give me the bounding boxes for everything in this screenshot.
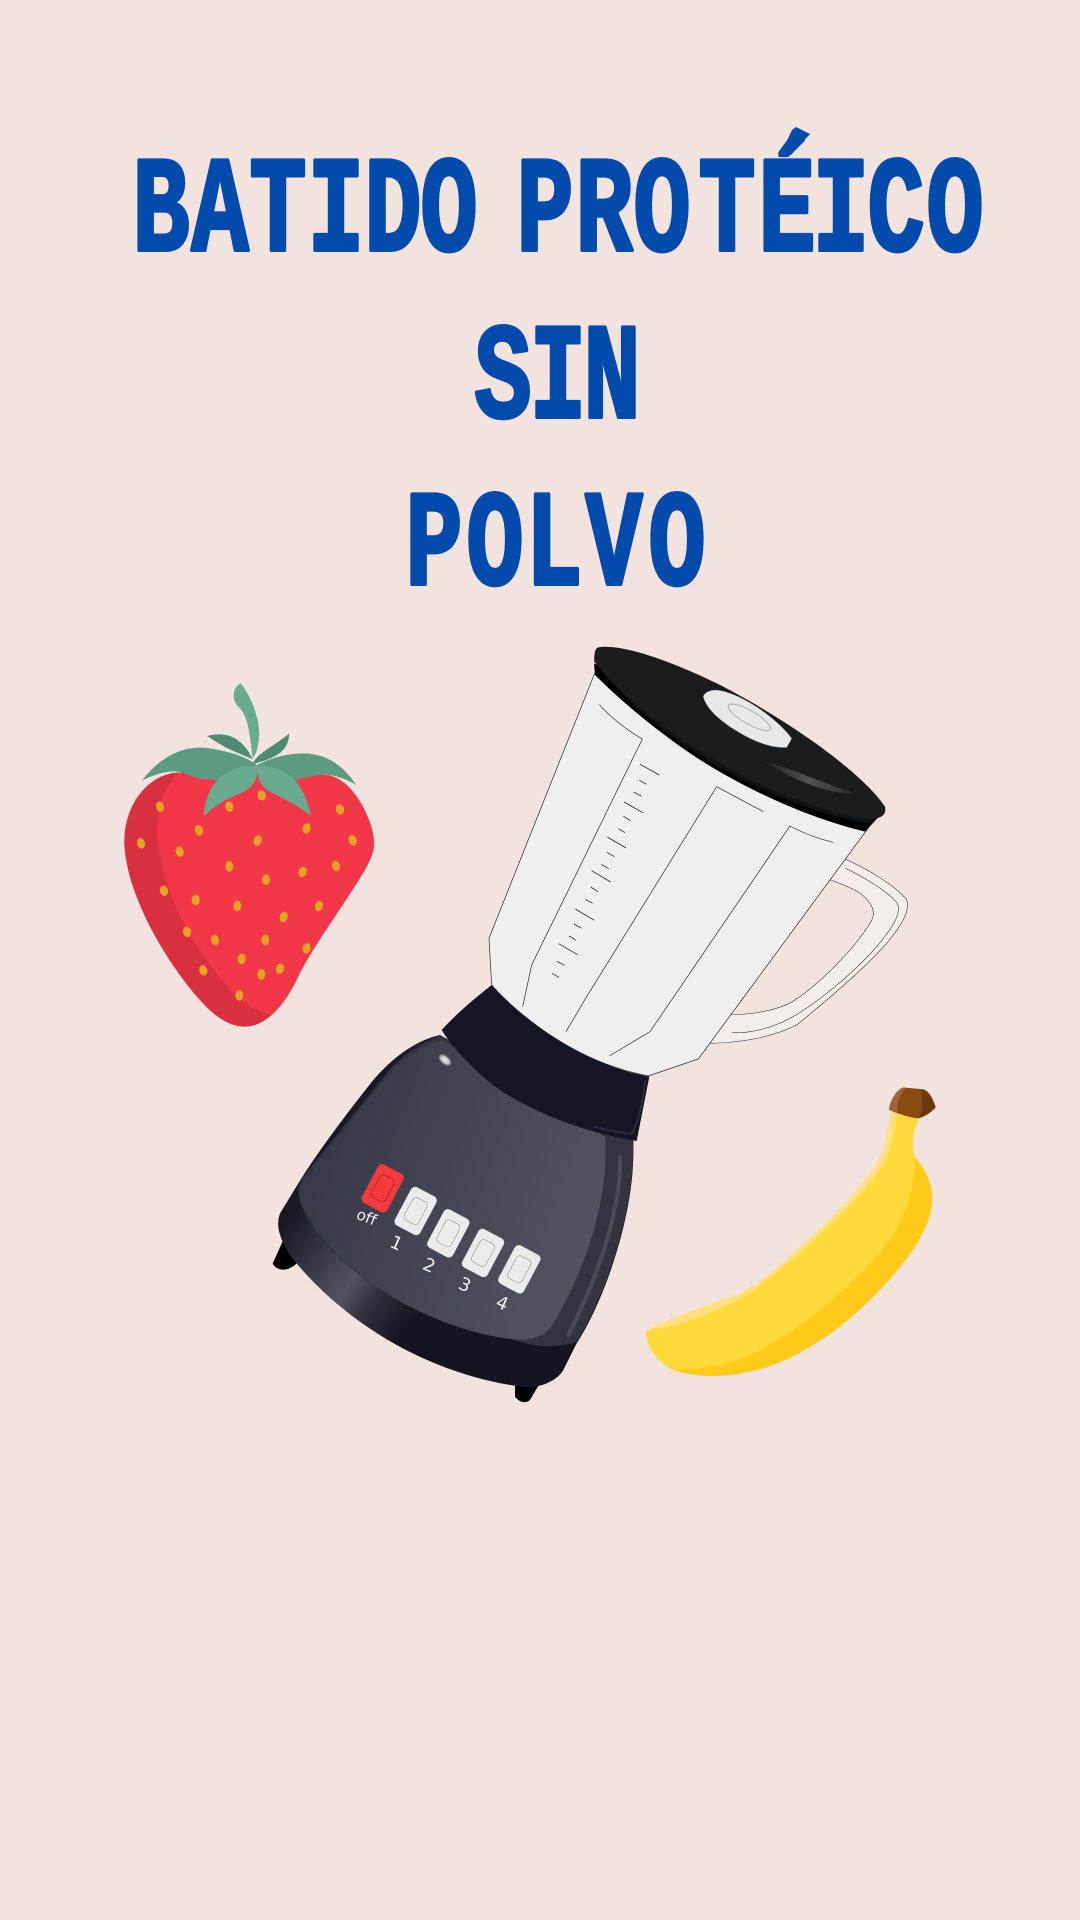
- right side highlight: [568, 1157, 620, 1335]
- banana main: [646, 1112, 919, 1370]
- lid highlight: [765, 762, 855, 793]
- button 1: [393, 1185, 438, 1237]
- button labels: [354, 1205, 511, 1316]
- side leaves: [142, 748, 356, 785]
- control panel face: [301, 1040, 606, 1340]
- label 1: 1: [387, 1232, 406, 1256]
- jar body: [489, 668, 872, 1076]
- strawberry body light: [157, 767, 374, 1015]
- buttons: [360, 1162, 542, 1295]
- control panel edge: [299, 1037, 633, 1346]
- label 4: 4: [492, 1292, 511, 1316]
- blender base group: [273, 985, 649, 1402]
- jar handle: [703, 857, 907, 1043]
- base shell: [278, 1035, 633, 1387]
- banana tip dark side: [918, 1089, 936, 1118]
- handle inner line: [732, 868, 898, 1033]
- banana tip: [889, 1087, 936, 1118]
- collar: [442, 985, 649, 1141]
- stem: [234, 683, 259, 758]
- banana shaded side: [646, 1112, 932, 1376]
- strawberry seeds: [136, 789, 358, 1001]
- button 4: [497, 1243, 542, 1295]
- collar edge highlight: [593, 1080, 645, 1134]
- title line 1: BATIDO PROTÉICO: [132, 136, 984, 292]
- banana tip light side: [889, 1087, 906, 1113]
- strawberry body shadow: [124, 767, 374, 1027]
- button 2: [426, 1207, 471, 1259]
- top glint: [436, 1052, 454, 1068]
- lid band: [594, 658, 885, 824]
- off button: [360, 1162, 405, 1214]
- back leaves: [207, 733, 289, 764]
- label off: off: [354, 1205, 380, 1230]
- title line 3: POLVO: [405, 472, 706, 626]
- left foot: [273, 1240, 297, 1270]
- jar facets: [523, 705, 833, 1056]
- title line 2: SIN: [474, 305, 641, 459]
- measurement ticks: [552, 764, 659, 977]
- title: [132, 127, 984, 626]
- lid underside: [594, 663, 885, 832]
- lid cap ring: [725, 700, 773, 735]
- icon: banana: [646, 1087, 936, 1376]
- label 3: 3: [455, 1273, 474, 1297]
- lid top: [594, 647, 885, 819]
- button 3: [460, 1227, 506, 1279]
- blender jar group: [489, 647, 907, 1076]
- accent mark reinforcement: [785, 127, 810, 155]
- lid cap: [703, 690, 792, 747]
- right foot: [515, 1382, 541, 1402]
- label 2: 2: [419, 1254, 438, 1278]
- banana highlight: [646, 1112, 898, 1331]
- icon: blender: [273, 647, 907, 1402]
- icon: strawberry: [124, 683, 374, 1027]
- front leaves: [204, 766, 311, 816]
